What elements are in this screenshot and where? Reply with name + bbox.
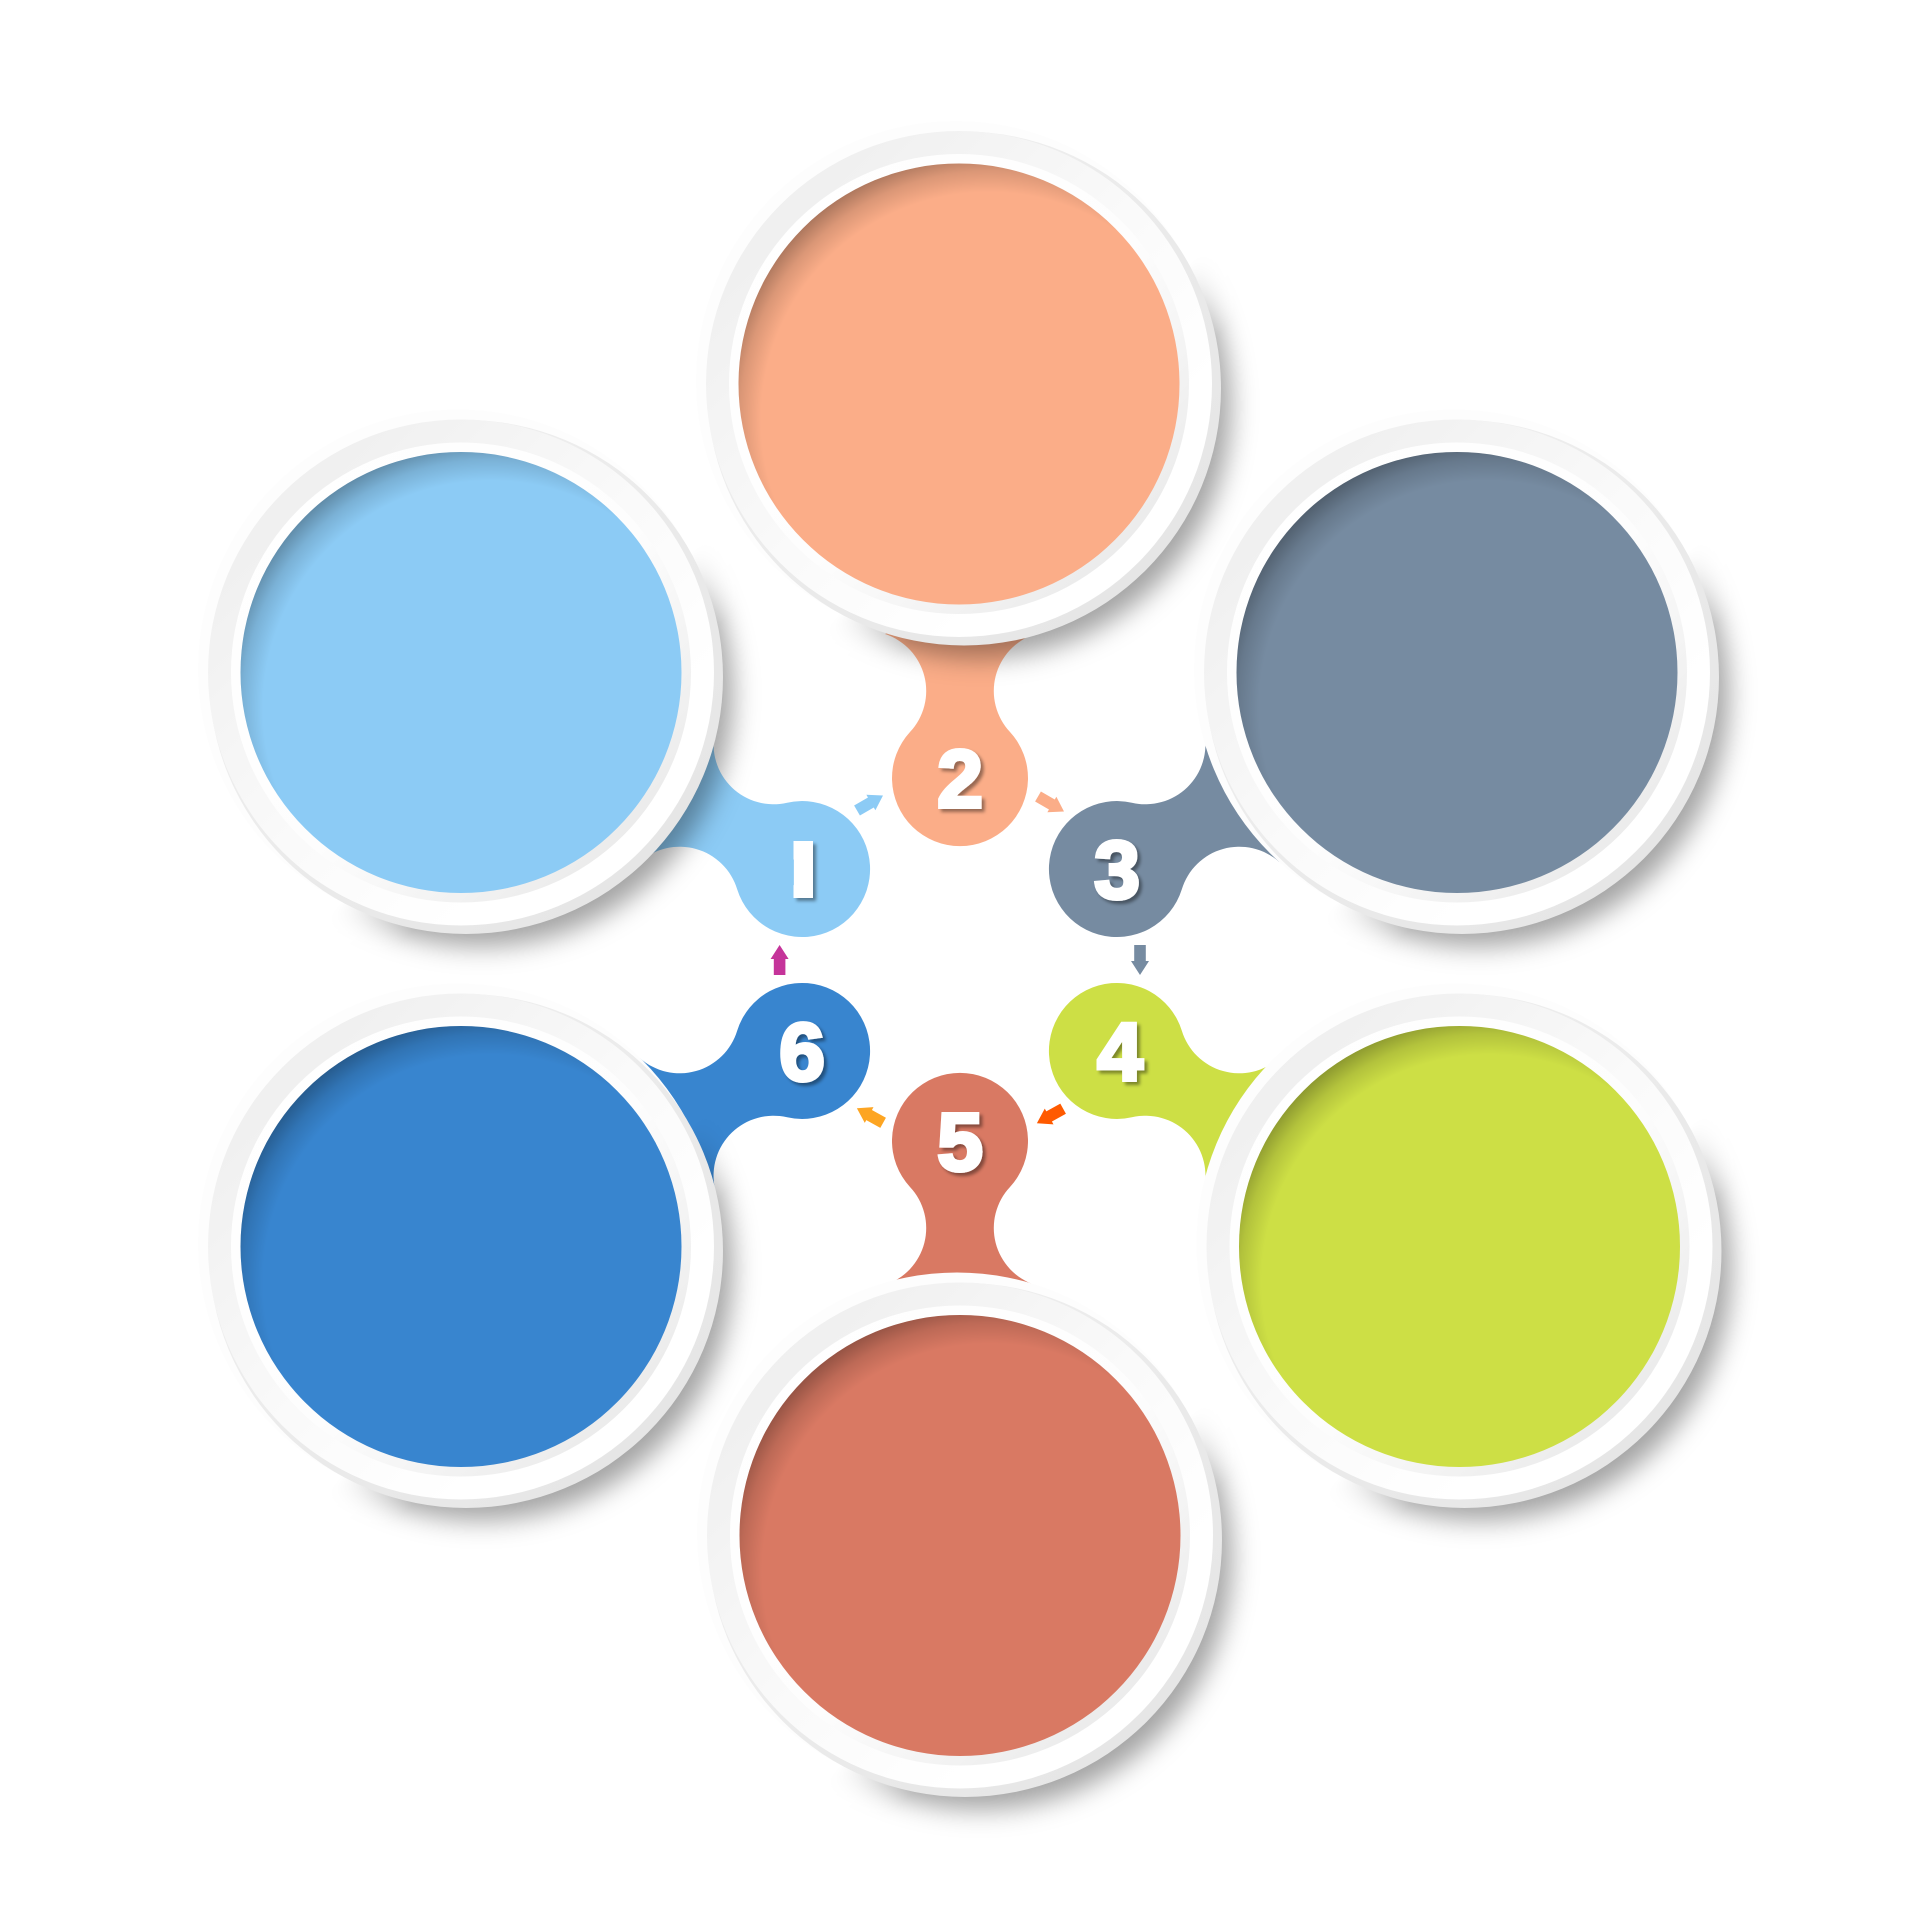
number 6: 6 — [779, 1007, 825, 1098]
arrow: 1 to 2 — [853, 788, 887, 818]
arrow: 4 to 5 — [1033, 1101, 1067, 1131]
panel: circle 4 lime — [1196, 984, 1732, 1520]
panel: circle 5 terracotta — [697, 1272, 1232, 1810]
connector blob 6 — [610, 952, 898, 1205]
panel: circle 6 blue — [198, 984, 733, 1520]
panel: circle 1 light blue — [198, 410, 733, 946]
connector blob 1 — [610, 715, 898, 968]
connector blob 4 — [1021, 952, 1309, 1205]
number 4: 4 — [1097, 1007, 1143, 1098]
connector blob 5 — [885, 1073, 1035, 1319]
arrow: 2 to 3 — [1034, 789, 1068, 819]
arrow: 5 to 6 — [853, 1100, 887, 1131]
number 3: 3 — [1094, 825, 1140, 916]
number 2: 2 — [937, 734, 983, 825]
panel: circle 2 peach — [696, 121, 1231, 658]
connector blob 2 — [885, 600, 1035, 846]
panel: circle 3 slate — [1194, 410, 1729, 946]
number 5: 5 — [937, 1097, 983, 1188]
arrow: 3 to 4 — [1131, 945, 1149, 975]
number 1: 1 — [779, 825, 825, 916]
arrow: 6 to 1 — [771, 945, 789, 975]
connector blob 3 — [1021, 715, 1309, 968]
